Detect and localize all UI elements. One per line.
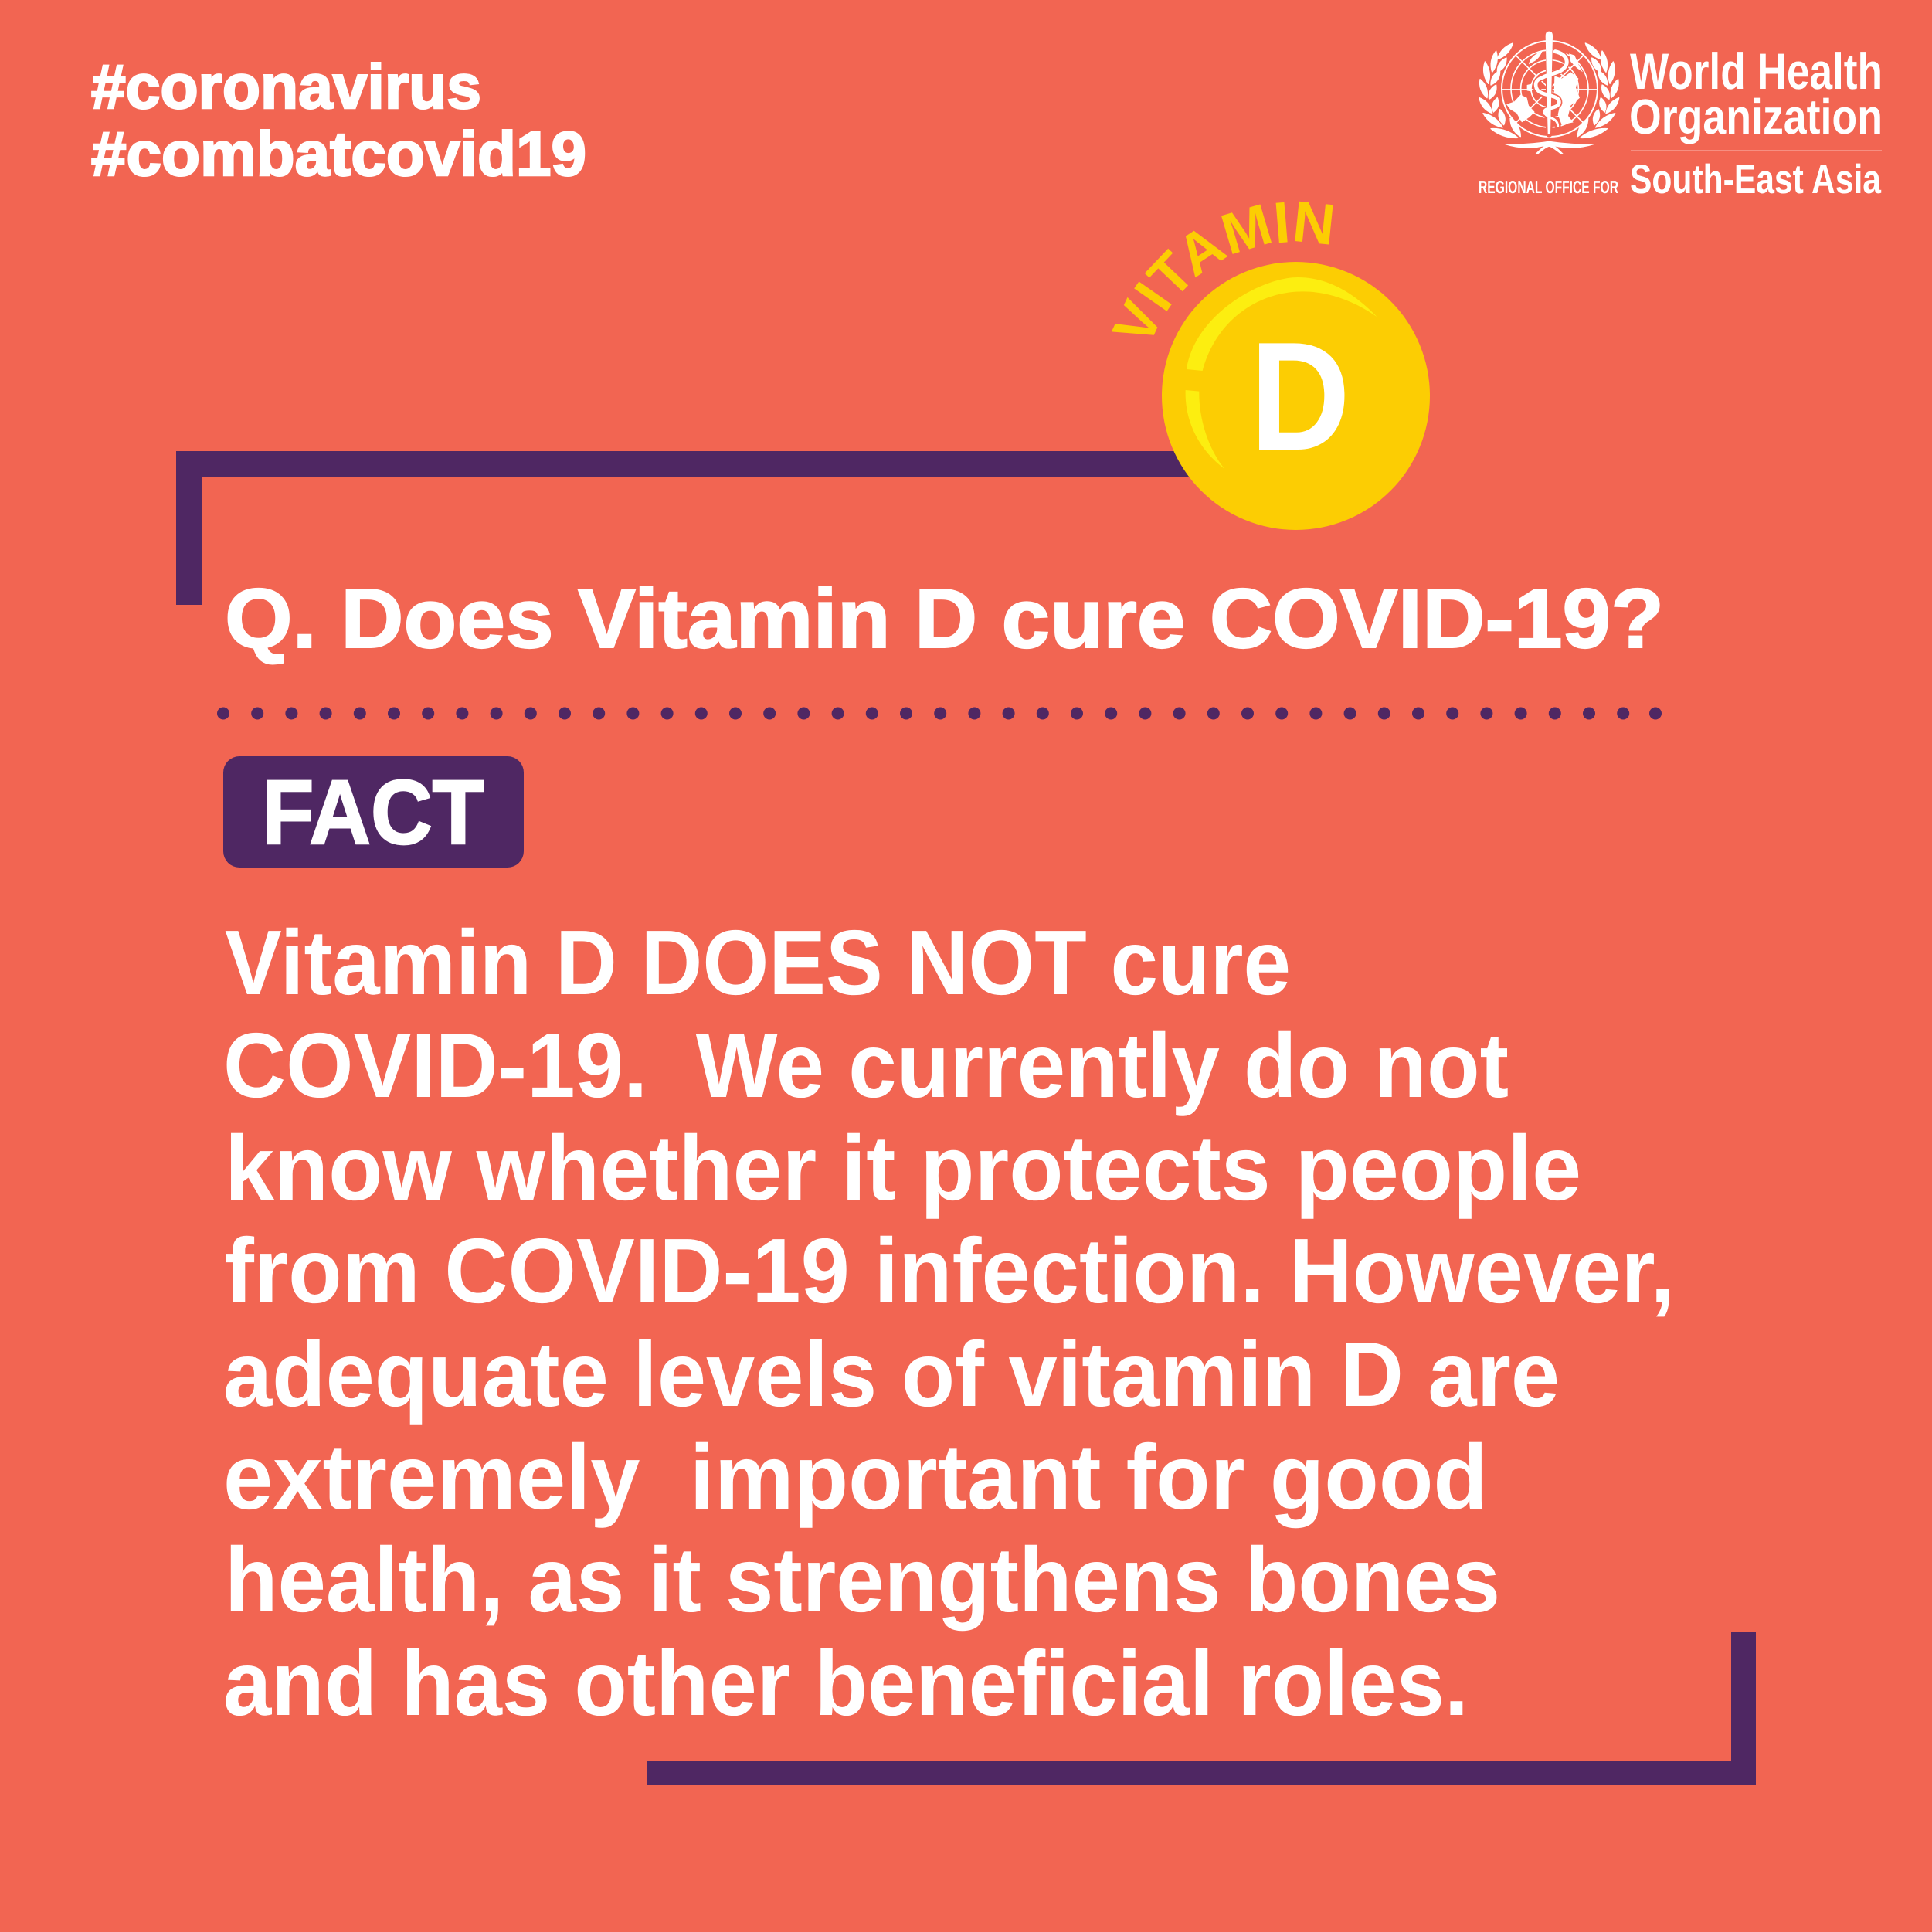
hashtags (91, 53, 586, 189)
dotted divider (217, 708, 1662, 720)
curved label VITAMIN: VITAMIN (1112, 201, 1333, 335)
staff and snake (1536, 39, 1567, 134)
letter D: D (1250, 311, 1350, 483)
icon: WHO emblem (1479, 32, 1619, 154)
icon: vitamin D capsule (1112, 201, 1430, 530)
hashtags: #coronavirus (91, 53, 481, 122)
question heading: Q. Does Vitamin D cure COVID-19? (225, 572, 1664, 666)
ribbon (1504, 141, 1595, 148)
globe rings (1502, 41, 1598, 137)
bottom-right bracket (647, 1632, 1756, 1785)
WHO logo: Organization (1629, 89, 1883, 144)
fact body text (223, 912, 1675, 1735)
fact body text: COVID-19. We currently do not (223, 1014, 1509, 1117)
continents (1506, 95, 1535, 122)
wreath right (1577, 43, 1619, 138)
FACT badge: FACT (262, 762, 484, 864)
fact body text: adequate levels of vitamin D are (223, 1323, 1560, 1426)
fact body text: from COVID-19 infection. However, (225, 1220, 1675, 1323)
hashtags: #combatcovid19 (91, 120, 586, 189)
WHO logo: REGIONAL OFFICE FOR (1479, 177, 1618, 197)
WHO logo (1479, 32, 1883, 202)
fact body text: health, as it strengthens bones (225, 1529, 1500, 1632)
highlight arcs (1186, 277, 1377, 469)
fact body text: Vitamin D DOES NOT cure (225, 912, 1291, 1014)
top-left bracket (176, 451, 1236, 605)
fact body text: know whether it protects people (225, 1117, 1581, 1220)
wreath left (1479, 43, 1520, 138)
fact body text: and has other beneficial roles. (223, 1632, 1469, 1735)
fact body text: extremely important for good (223, 1426, 1488, 1529)
